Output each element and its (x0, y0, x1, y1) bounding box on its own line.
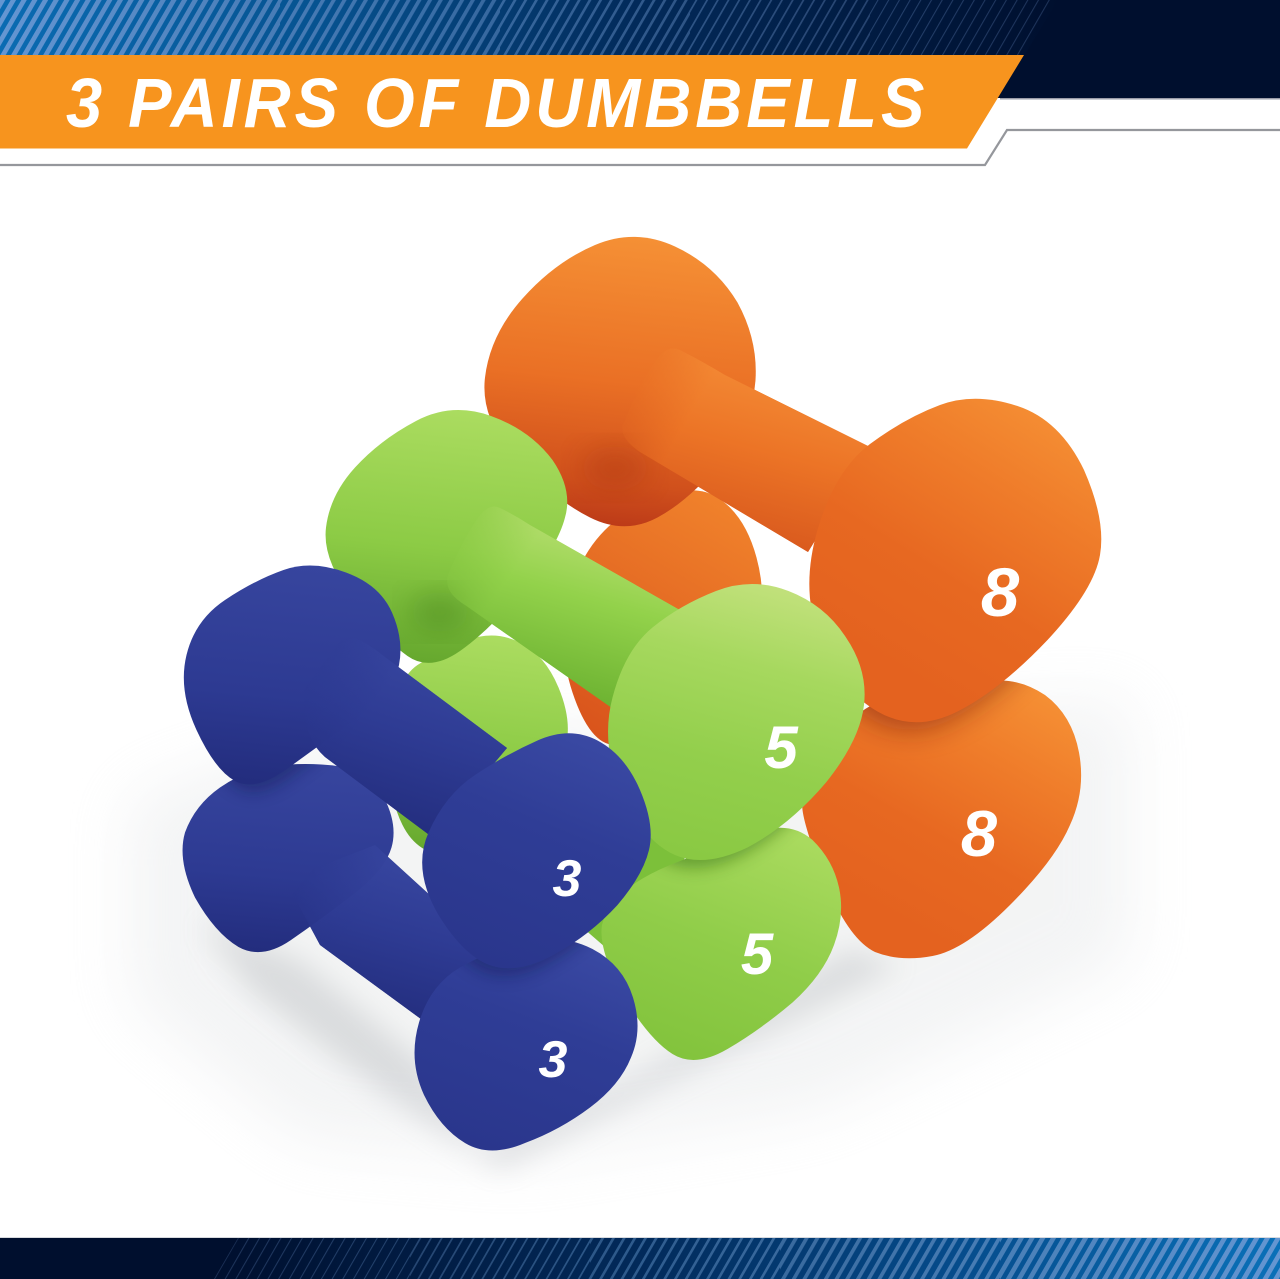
bar underlay (447, 507, 685, 708)
number 3: 3 (553, 850, 582, 908)
top header band (0, 0, 1280, 165)
number 8: 8 (961, 797, 998, 870)
orange dumbbell, top (484, 237, 1101, 722)
green dumbbell, bottom (396, 636, 842, 1060)
number 5: 5 (764, 714, 799, 781)
floor shadow (130, 700, 1130, 1170)
striped band (0, 0, 1058, 56)
back head (326, 410, 567, 663)
bar underlay (622, 348, 872, 552)
number 8: 8 (981, 554, 1020, 631)
orange dumbbell, bottom (568, 490, 1082, 958)
number 3: 3 (539, 1031, 568, 1089)
back head (389, 636, 568, 856)
back head (564, 490, 762, 745)
bar (447, 507, 685, 708)
dumbbell stack (183, 237, 1101, 1151)
back head (184, 566, 400, 785)
bar underlay (285, 845, 490, 1022)
navy block (900, 0, 1280, 98)
number 5: 5 (741, 922, 774, 987)
front head (422, 733, 651, 968)
blue dumbbell, top (184, 566, 651, 968)
green dumbbell, top (326, 410, 865, 860)
front head (414, 942, 638, 1150)
grey rule (0, 130, 1280, 165)
blue dumbbell, bottom (182, 764, 638, 1150)
bar underlay (304, 638, 507, 837)
bar (622, 348, 872, 552)
back head (182, 764, 394, 952)
title: 3 PAIRS OF DUMBBELLS (66, 65, 924, 143)
bar (316, 667, 507, 834)
front head (608, 584, 865, 860)
title banner (0, 55, 1024, 148)
back head (484, 237, 756, 526)
bottom striped band (0, 1237, 1280, 1279)
front head (602, 828, 842, 1060)
front head (809, 399, 1101, 722)
bar (310, 856, 428, 1018)
front head (802, 680, 1082, 958)
bar (470, 760, 690, 960)
